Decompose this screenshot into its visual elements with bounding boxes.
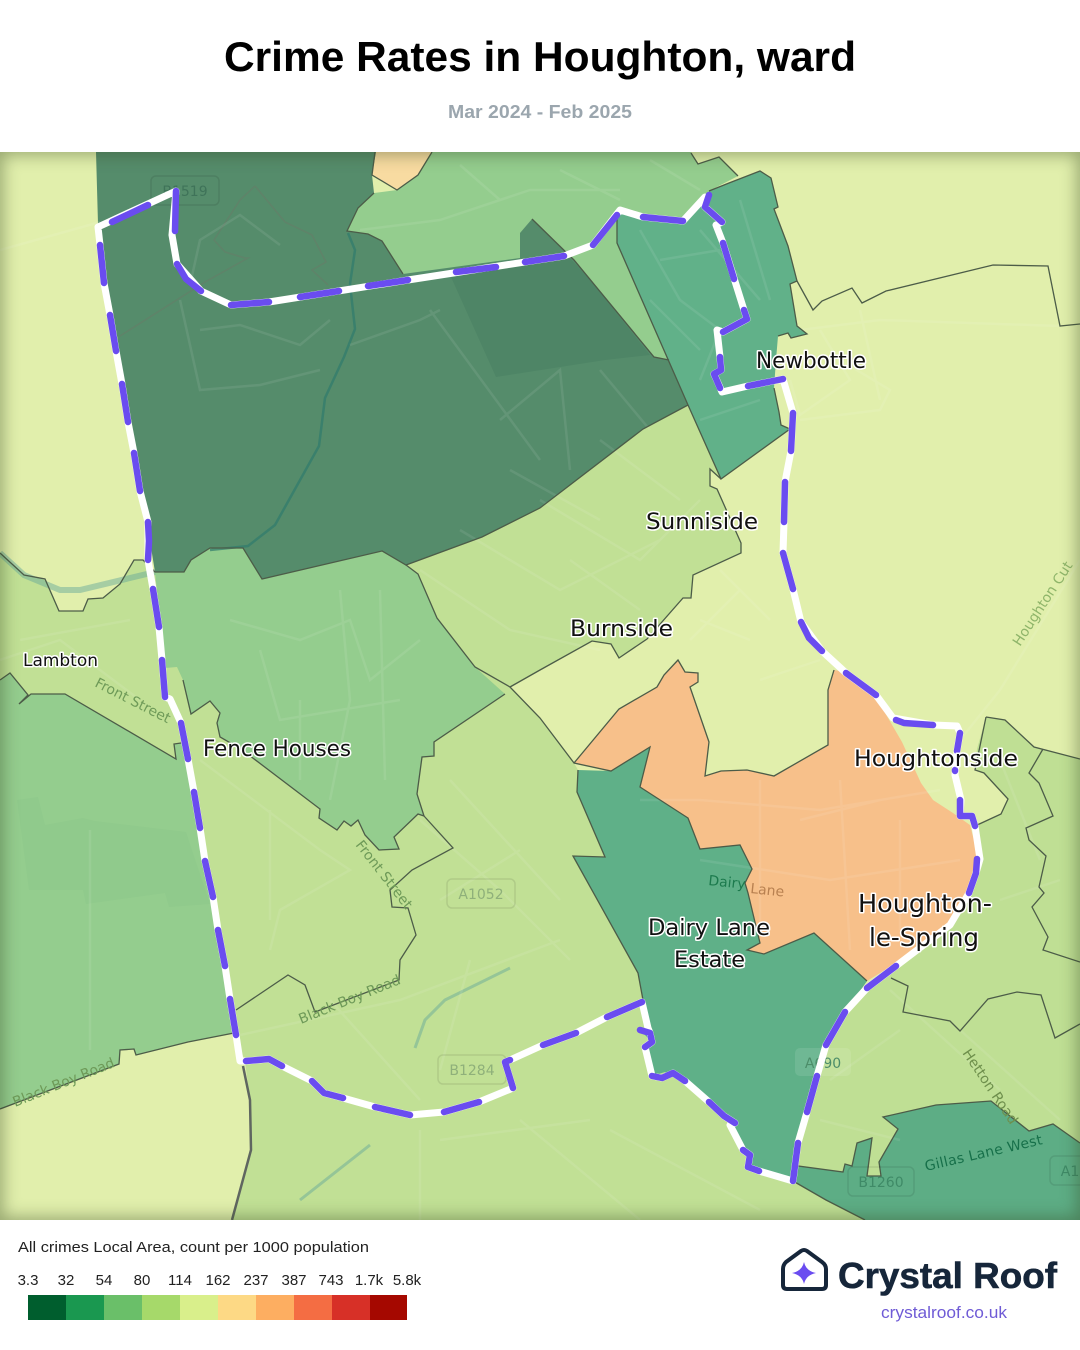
choropleth map bbox=[0, 152, 1080, 1220]
ward boundary: purple dashes bbox=[100, 191, 977, 1181]
area: Gillas Lane teal bbox=[793, 1101, 1080, 1220]
area: pale orange tip bbox=[372, 152, 432, 190]
road shields: A1 bbox=[1061, 1164, 1079, 1180]
place names: Dairy Lane bbox=[648, 916, 770, 941]
road shields: B1519 bbox=[162, 184, 208, 200]
place names: Houghton- bbox=[858, 889, 992, 918]
legend scale labels: 3.3 bbox=[18, 1272, 38, 1289]
road names: Houghton Cut bbox=[1010, 558, 1077, 649]
logo: Crystal Roof bbox=[781, 1248, 1058, 1322]
legend scale labels: 54 bbox=[96, 1272, 112, 1289]
road shields: A690 bbox=[805, 1056, 841, 1072]
subtitle: date range: Mar 2024 - Feb 2025 bbox=[448, 102, 632, 122]
road names: Hetton Road bbox=[959, 1046, 1021, 1127]
road names bbox=[11, 558, 1077, 1175]
logo wordmark: Crystal Roof bbox=[838, 1255, 1058, 1296]
area: west green darker field bbox=[17, 797, 210, 907]
road names: Dairy bbox=[708, 873, 746, 893]
area: lower-left pale field bbox=[0, 1033, 251, 1220]
water: river and ponds bbox=[0, 233, 510, 1200]
legend scale labels: 743 bbox=[318, 1272, 344, 1289]
place names: Houghtonside bbox=[854, 747, 1018, 772]
road names: Front Street bbox=[92, 675, 173, 727]
road names: Lane bbox=[750, 881, 785, 901]
title: Crime Rates in Houghton, ward bbox=[224, 33, 856, 80]
area: Newbottle teal bbox=[617, 171, 807, 479]
legend colour ramp bbox=[28, 1295, 407, 1320]
legend scale labels: 114 bbox=[168, 1272, 192, 1289]
area: Dairy Lane teal bbox=[573, 747, 867, 1181]
map edge vignette bbox=[0, 152, 1080, 1220]
road names: Black Boy Road bbox=[11, 1055, 117, 1111]
road shields: B1260 bbox=[858, 1175, 904, 1191]
place names bbox=[23, 349, 1018, 973]
place names: Newbottle bbox=[756, 349, 866, 374]
legend scale labels: 80 bbox=[134, 1272, 150, 1289]
legend scale labels: 1.7k bbox=[355, 1272, 384, 1289]
legend scale labels bbox=[18, 1272, 422, 1289]
website link: crystalroof.co.uk bbox=[881, 1304, 1008, 1322]
footpaths in woodland bbox=[120, 186, 328, 336]
legend scale labels: 5.8k bbox=[393, 1272, 422, 1289]
area: darker field patch bbox=[451, 258, 650, 377]
legend scale labels: 237 bbox=[243, 1272, 269, 1289]
area: east mid green bbox=[793, 717, 1080, 1220]
legend scale labels: 32 bbox=[58, 1272, 74, 1289]
icon: house with star bbox=[783, 1250, 826, 1289]
road shields: B1284 bbox=[449, 1063, 495, 1079]
road names: Front Street bbox=[352, 838, 416, 913]
legend scale labels: 387 bbox=[281, 1272, 307, 1289]
area: orange high crime bbox=[574, 660, 977, 981]
road names: Black Boy Road bbox=[297, 972, 403, 1028]
legend title: All crimes Local Area, count per 1000 population bbox=[18, 1239, 369, 1256]
place names: Burnside bbox=[570, 617, 673, 642]
area: Fence Houses green bbox=[155, 548, 505, 850]
area: north green bbox=[347, 152, 738, 360]
place names: Sunniside bbox=[646, 510, 758, 535]
boundary lines bbox=[0, 152, 1080, 1220]
area: Sunniside mid green bbox=[406, 405, 741, 689]
area: south-west mid green bbox=[0, 553, 865, 1220]
road shields bbox=[151, 176, 1080, 1196]
road names: Gillas Lane West bbox=[923, 1132, 1044, 1175]
area: pale base fields bbox=[0, 152, 1080, 1220]
street network bbox=[0, 160, 1080, 1220]
area: west green bbox=[0, 673, 234, 1109]
place names: le-Spring bbox=[869, 923, 979, 952]
road shields: A1052 bbox=[458, 887, 504, 903]
legend bbox=[18, 1239, 422, 1320]
ward boundary: white casing bbox=[98, 191, 980, 1181]
place names: Estate bbox=[674, 948, 745, 973]
legend scale labels: 162 bbox=[205, 1272, 231, 1289]
place names: Lambton bbox=[23, 651, 98, 670]
area: dark green woodland bbox=[96, 152, 688, 579]
place names: Fence Houses bbox=[203, 737, 351, 762]
